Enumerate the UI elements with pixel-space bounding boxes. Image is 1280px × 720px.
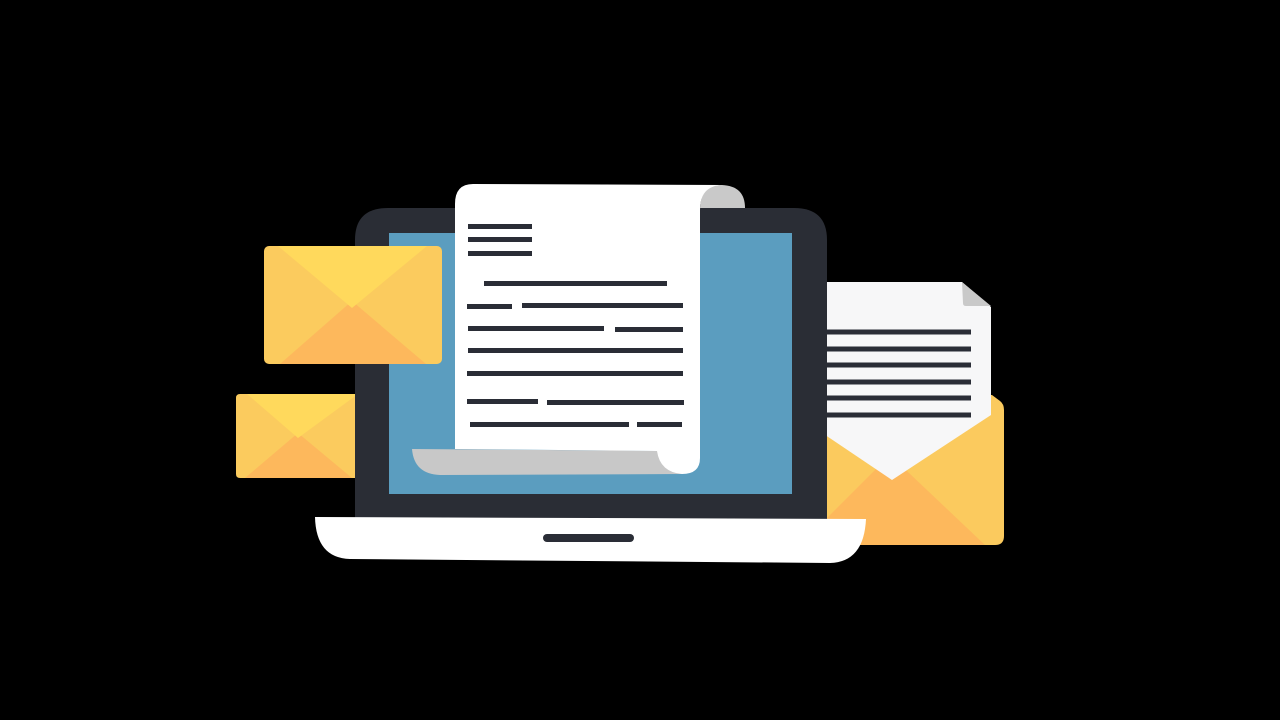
document text lines: [467, 224, 684, 427]
laptop base: [315, 517, 866, 563]
document scroll: [412, 184, 745, 475]
icon: large envelope upper left: [264, 246, 442, 364]
laptop screen: [355, 208, 827, 522]
icon: small envelope lower left: [236, 394, 360, 478]
icon: open envelope with letter at right: [800, 282, 1004, 545]
letter sheet: [800, 282, 991, 480]
